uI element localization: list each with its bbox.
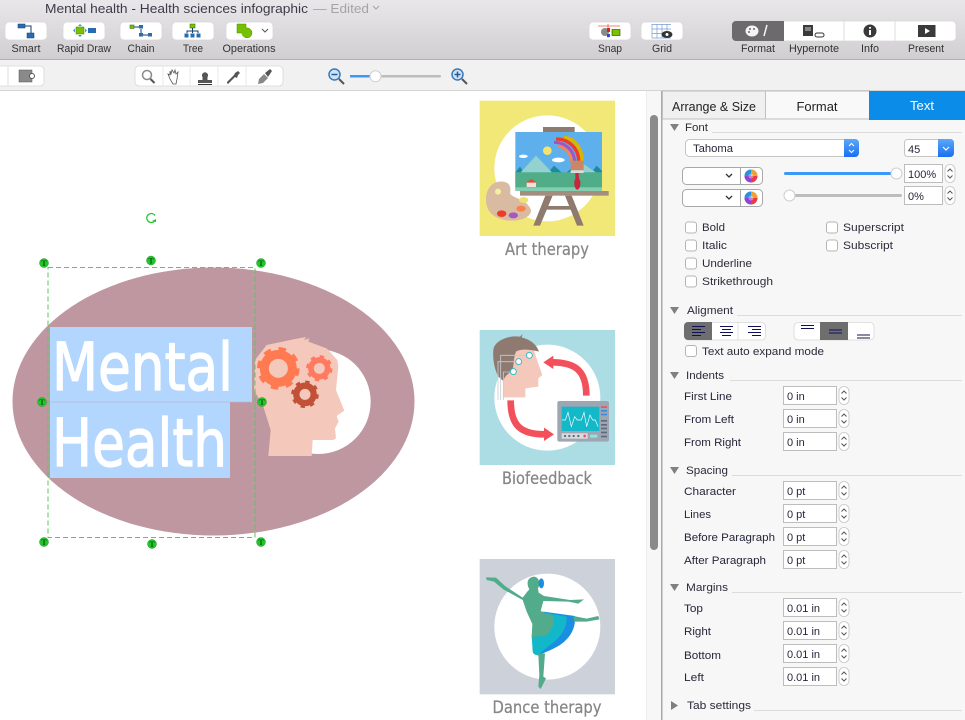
section: Font: Subscript xyxy=(843,240,893,252)
card: Dance therapy xyxy=(480,559,615,718)
selection frame with handles: T xyxy=(41,259,47,268)
selection frame with handles: T xyxy=(41,538,47,547)
section: Spacing: 0 pt xyxy=(787,486,805,498)
maroon ellipse xyxy=(12,268,414,536)
card: Art therapy: Art therapy xyxy=(505,240,589,260)
tabs: Arrange & Size xyxy=(672,100,756,114)
section: Font: Superscript xyxy=(843,222,904,234)
selection frame with handles xyxy=(38,214,266,549)
section: Indents: 0 in xyxy=(787,391,805,403)
card: Biofeedback: Biofeedback xyxy=(502,469,592,489)
section: Font: Bold xyxy=(702,222,725,234)
section: Spacing: Character xyxy=(684,486,736,498)
section: Font: 100% xyxy=(908,169,936,181)
tabs xyxy=(662,91,965,120)
button: Operations xyxy=(222,22,276,55)
section: Font: Font xyxy=(685,122,708,134)
section: Font: Italic xyxy=(702,240,728,252)
segmented control: Format, Hypernote, Info, Present: Hypernote xyxy=(789,43,839,55)
window toolbar xyxy=(0,0,965,60)
document title: — Edited xyxy=(313,1,369,16)
section: Indents: 0 in xyxy=(787,437,805,449)
button: Snap xyxy=(589,22,631,55)
card: Art therapy xyxy=(480,101,615,260)
section: Font: 45 xyxy=(908,144,920,156)
painting xyxy=(515,132,602,191)
section: Indents: First Line xyxy=(684,391,732,403)
selected text: Health xyxy=(52,405,227,482)
section: Spacing: 0 pt xyxy=(787,555,805,567)
segmented control: Format, Hypernote, Info, Present: Info xyxy=(861,43,879,55)
section: Indents: Indents xyxy=(686,370,725,382)
section: Spacing: 0 pt xyxy=(787,509,805,521)
zoom slider xyxy=(329,69,467,84)
section: Margins: 0.01 in xyxy=(787,603,820,615)
section: Spacing: Lines xyxy=(684,509,712,521)
head illustration xyxy=(254,337,371,456)
selection frame with handles: T xyxy=(39,398,45,407)
button: Chain xyxy=(120,22,162,55)
button: Smart xyxy=(5,22,47,55)
section: Alignment: Text auto expand mode xyxy=(702,346,824,358)
button: Rapid Draw: Rapid Draw xyxy=(57,43,111,55)
segmented control: Format, Hypernote, Info, Present: Format xyxy=(741,43,775,55)
tabs: Text xyxy=(910,99,935,113)
segmented control: Format, Hypernote, Info, Present xyxy=(732,21,956,55)
paint brush xyxy=(571,161,584,170)
section: Spacing: Spacing xyxy=(686,465,728,477)
section: Font xyxy=(670,122,962,288)
button: Grid xyxy=(641,22,683,55)
palette xyxy=(486,181,531,221)
button: Grid: Grid xyxy=(652,43,672,55)
section: Margins xyxy=(670,582,962,686)
section: Tab settings: Tab settings xyxy=(687,700,752,712)
section: Margins: Top xyxy=(684,603,703,615)
section: Margins: Bottom xyxy=(684,650,721,662)
dancer xyxy=(533,612,575,656)
section: Alignment: Aligment xyxy=(687,305,733,317)
button: Chain: Chain xyxy=(128,43,154,55)
monitor xyxy=(557,401,609,442)
inspector panel xyxy=(661,91,965,720)
section: Tab settings xyxy=(671,700,962,712)
section: Font: 0% xyxy=(908,191,924,203)
section: Margins: Right xyxy=(684,626,711,638)
tool group xyxy=(135,66,283,86)
button: Tree: Tree xyxy=(183,43,203,55)
button: Rapid Draw xyxy=(57,22,111,55)
section: Spacing: After Paragraph xyxy=(684,555,766,567)
canvas scroll bar xyxy=(646,91,662,720)
section: Margins: 0.01 in xyxy=(787,626,820,638)
document title: Mental health - Health sciences infographic xyxy=(45,1,309,16)
button: Smart: Smart xyxy=(12,43,40,55)
section: Indents: From Left xyxy=(684,414,734,426)
secondary toolbar xyxy=(0,60,965,91)
section: Margins: 0.01 in xyxy=(787,672,820,684)
selection frame with handles: T xyxy=(258,538,264,547)
section: Spacing xyxy=(670,465,962,568)
button: Tree xyxy=(172,22,214,55)
section: Font: Strikethrough xyxy=(702,276,773,288)
section: Alignment xyxy=(670,305,962,358)
easel xyxy=(533,127,584,226)
page tool button xyxy=(0,66,44,86)
selected text xyxy=(50,327,252,482)
button: Operations: Operations xyxy=(222,43,276,55)
arrows xyxy=(552,362,586,396)
section: Spacing: Before Paragraph xyxy=(684,532,775,544)
button: Snap: Snap xyxy=(598,43,622,55)
selected text: Mental xyxy=(52,329,233,406)
face xyxy=(503,348,542,397)
selection frame with handles: T xyxy=(259,398,265,407)
selection frame with handles: T xyxy=(149,540,155,549)
tabs: Format xyxy=(796,100,838,114)
section: Indents: From Right xyxy=(684,437,741,449)
section: Indents: 0 in xyxy=(787,414,805,426)
section: Indents xyxy=(670,370,962,450)
card: Dance therapy: Dance therapy xyxy=(492,698,602,718)
electrodes xyxy=(498,355,527,400)
section: Margins: Left xyxy=(684,672,704,684)
section: Spacing: 0 pt xyxy=(787,532,805,544)
section: Margins: 0.01 in xyxy=(787,649,820,661)
card: Biofeedback xyxy=(480,330,615,489)
segmented control: Format, Hypernote, Info, Present: Present xyxy=(908,43,944,55)
selection frame with handles: T xyxy=(258,259,264,268)
section: Margins: Margins xyxy=(686,582,729,594)
gears xyxy=(259,349,331,407)
section: Font: Underline xyxy=(702,258,752,270)
selection frame with handles: T xyxy=(148,256,154,266)
section: Font: Tahoma xyxy=(693,143,734,155)
central shape: Mental Health xyxy=(12,214,414,549)
